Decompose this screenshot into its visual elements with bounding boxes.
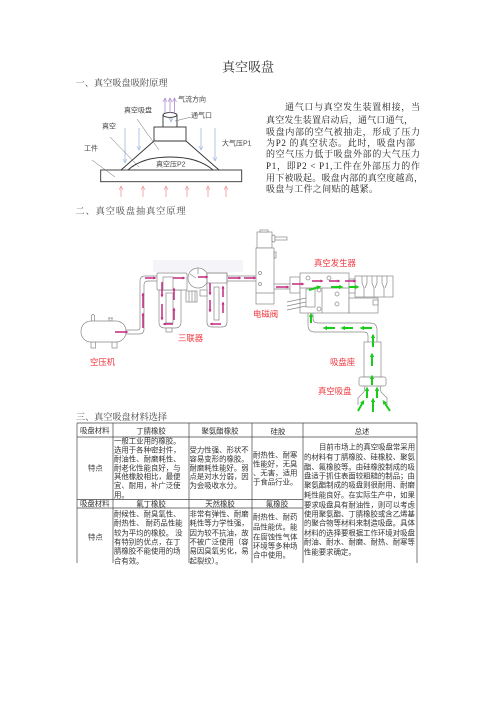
heading: section three: 三、真空吸盘材料选择	[76, 411, 167, 422]
text block: principle description	[266, 101, 423, 194]
chloroprene rubber description: 耐热性、 耐药品性能	[114, 518, 183, 528]
row 2 label: 特点	[88, 532, 103, 542]
table grid	[77, 423, 417, 563]
suction cup	[358, 377, 387, 405]
silicone description	[253, 450, 298, 486]
natural rubber description: 非常有弹性、耐磨	[190, 510, 249, 518]
table header row 1: 总述	[355, 427, 370, 436]
pipe to solenoid valve	[227, 276, 290, 289]
polyurethane rubber description: 为会吸收水分。	[190, 481, 241, 490]
table header row 2: 氟橡胶	[266, 500, 289, 508]
diagram: vacuum circuit	[81, 230, 393, 412]
summary column: 的材料有丁腈橡胶、硅橡胶、聚氨	[304, 452, 415, 462]
fluororubber description: 在腐蚀性气体	[253, 532, 298, 542]
air compressor	[81, 314, 126, 348]
nitrile rubber description: 用。	[114, 490, 129, 500]
filter regulator unit	[157, 268, 227, 332]
leader lines	[92, 117, 191, 177]
table header row 2: 氟丁橡胶	[136, 500, 166, 508]
silicone description: 耐热性、耐寒	[253, 450, 298, 460]
table header row 1: 吸盘材料	[80, 426, 110, 435]
table header row 2: 吸盘材料	[80, 499, 110, 508]
summary column: 盘适于抓住表面较粗糙的制品；由	[304, 472, 415, 480]
heading: section two: 二、真空吸盘抽真空原理	[76, 205, 186, 216]
chloroprene rubber description: 腈橡胶不能使用的场	[114, 546, 181, 556]
chloroprene rubber description	[114, 510, 183, 566]
red component labels: 三联器	[178, 333, 204, 343]
table header row 1	[80, 426, 370, 436]
text block: principle description: P1，即P2 < P1,工件在外部压力的作	[266, 160, 420, 172]
suction seat	[364, 342, 381, 377]
polyurethane rubber description: 容易变形的橡胶。	[190, 454, 249, 464]
summary column: 使用聚氨酯、丁腈橡胶或含乙烯基	[304, 510, 415, 518]
diagram labels: 真空	[102, 122, 116, 130]
text block: principle description: 的空气压力低于吸盘外部的大气压力	[266, 148, 420, 159]
natural rubber description	[190, 510, 249, 566]
table header row 1: 聚氨酯橡胶	[202, 426, 239, 436]
summary column: 的聚合物等材料来制造吸盘。具体	[304, 518, 415, 528]
chloroprene rubber description: 耐候性、耐臭氧性、	[114, 510, 181, 518]
fluororubber description	[253, 512, 298, 560]
silicone description: 于食品行业。	[253, 478, 297, 486]
nitrile rubber description	[114, 436, 181, 500]
nitrile rubber description: 其他橡胶相比，最便	[114, 472, 181, 481]
red component labels: 真空吸盘	[318, 386, 352, 396]
table header row 2	[80, 499, 289, 508]
silicone description: 性能好，无臭	[253, 460, 298, 468]
title: 真空吸盘	[222, 60, 274, 74]
green vacuum flow arrows	[309, 287, 390, 412]
air pipe: compressor to filter	[126, 276, 157, 334]
solenoid valve	[256, 230, 287, 304]
airflow arrows	[165, 98, 174, 113]
fluororubber description: 品性能优。能	[253, 522, 298, 532]
upward pressure arrows	[121, 186, 226, 197]
text block: principle description: 为P2 的真空状态。此时，吸盘内部	[266, 137, 415, 149]
diagram labels: 工件	[84, 144, 98, 152]
diagram labels: 真空压P2	[156, 160, 186, 168]
polyurethane rubber description: 点是对水分弱，因	[190, 472, 249, 481]
red component labels: 吸盘座	[330, 357, 355, 367]
silicone description: 、无害，适用	[253, 468, 297, 478]
diagram labels: 真空吸盘	[124, 106, 152, 114]
heading: section one: 一、真空吸盘吸附原理	[76, 77, 168, 88]
natural rubber description: 耗性等力学性强，	[190, 518, 249, 528]
summary column: 酯、氟橡胶等。由硅橡胶制成的吸	[304, 462, 415, 472]
summary column: 要求吸盘具有耐油性，则可以考虑	[304, 500, 415, 510]
text block: principle description: 通气口与真空发生装置相接，当	[285, 101, 420, 113]
chloroprene rubber description: 有特别的优点，在丁	[114, 538, 181, 546]
pink airflow arrows	[115, 277, 355, 332]
diagram: suction cup adsorption principle	[84, 94, 252, 197]
hose to suction seat	[308, 313, 377, 342]
diagram labels: 通气口	[191, 110, 212, 120]
summary column	[304, 442, 415, 556]
diagram labels: 气流方向	[178, 94, 206, 104]
red component labels	[90, 258, 356, 396]
red component labels: 真空发生器	[314, 258, 356, 268]
text block: principle description: 吸盘内部的空气被抽走，形成了压力	[266, 126, 420, 138]
table header row 1: 硅胶	[271, 427, 286, 436]
row 1 label: 特点	[88, 464, 103, 472]
diagram labels	[84, 94, 252, 168]
nitrile rubber description: 耐老化性能良好，与	[114, 464, 181, 472]
table: suction cup materials	[77, 423, 417, 566]
natural rubber description: 不被广泛使用（容	[190, 538, 249, 546]
summary column: 耗性能良好。在实际生产中，如果	[304, 490, 415, 500]
summary column: 耐油、耐水、耐磨、耐热、耐寒等	[304, 538, 415, 546]
vacuum generator	[287, 273, 393, 313]
summary column: 目前市场上的真空吸盘常采用	[319, 442, 415, 452]
text block: principle description: 用下被吸起。吸盘内部的真空度越高，	[266, 172, 423, 184]
chloroprene rubber description: 较为平均的橡胶。 没	[114, 528, 183, 538]
summary column: 聚氨酯制成的吸盘则很耐用、耐磨	[304, 480, 415, 490]
fluororubber description: 耐热性、耐药	[253, 512, 297, 522]
nitrile rubber description: 宜、耐用，补广泛使	[114, 481, 181, 490]
summary column: 材料的选择要根据工作环境对吸盘	[304, 528, 415, 538]
nitrile rubber description: 耐油性、耐磨耗性、	[114, 454, 181, 464]
polyurethane rubber description	[190, 446, 249, 490]
nitrile rubber description: 选用于各种密封件，	[114, 446, 181, 454]
nitrile rubber description: 一般工业用的橡胶。	[114, 436, 181, 446]
natural rubber description: 因为较不抗油，故	[190, 528, 249, 538]
red component labels: 电磁阀	[253, 309, 278, 319]
summary column: 性能要求确定。	[304, 548, 356, 556]
fluororubber description: 环境等多种场	[253, 542, 297, 550]
natural rubber description: 起裂纹）。	[190, 556, 223, 566]
chloroprene rubber description: 合有效。	[114, 556, 144, 566]
fluororubber description: 合中使用。	[253, 550, 290, 560]
suction cup	[121, 113, 219, 170]
table header row 2: 天然橡胶	[205, 500, 235, 508]
diagram labels: 大气压P1	[222, 138, 252, 148]
polyurethane rubber description: 耐磨耗性能好。弱	[190, 464, 249, 472]
table header row 1: 丁腈橡胶	[136, 426, 166, 436]
natural rubber description: 易因臭氧劣化，易	[190, 546, 249, 556]
polyurethane rubber description: 受力性强、形状不	[190, 446, 249, 454]
text block: principle description: 吸盘与工件之间贴的越紧。	[266, 183, 378, 194]
red component labels: 空压机	[90, 357, 116, 367]
text block: principle description: 真空发生装置启动后，通气口通气，	[266, 114, 413, 126]
workpiece	[101, 170, 242, 182]
atmospheric pressure arrows	[125, 118, 215, 163]
